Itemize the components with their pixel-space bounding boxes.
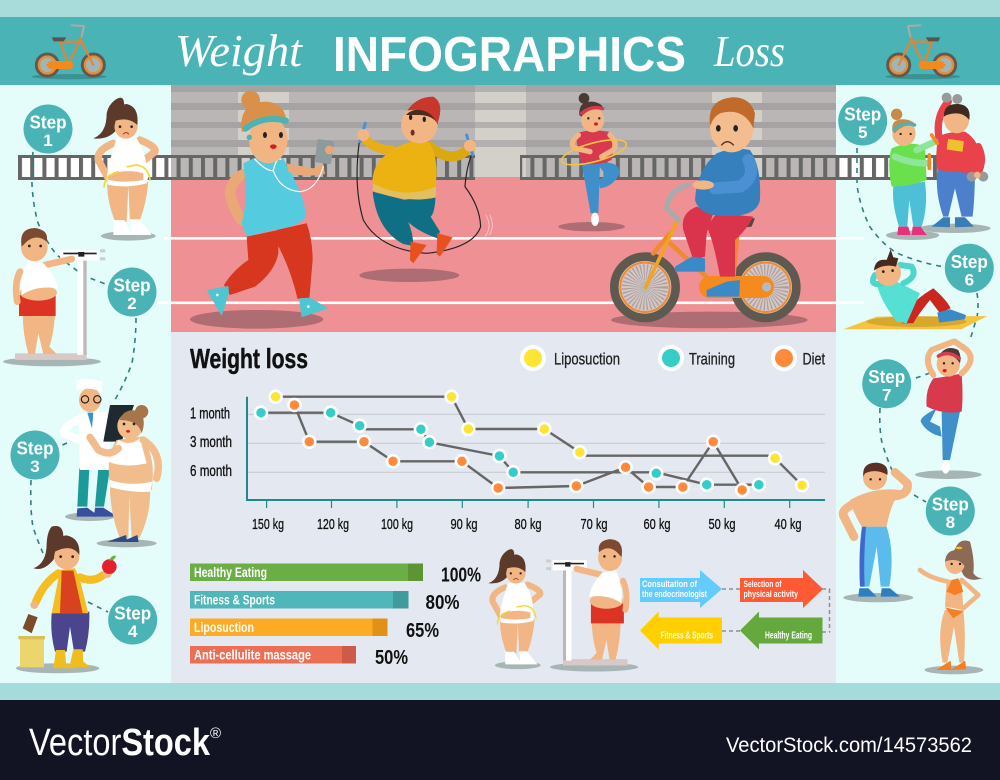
step badge 2 bbox=[108, 268, 156, 316]
arrow: consultation bbox=[640, 570, 722, 608]
y axis labels bbox=[190, 406, 232, 480]
running track bbox=[157, 177, 864, 332]
character: step 7 woman in tree pose bbox=[915, 342, 982, 479]
arrow: fitness and sports: Fitness & Sports bbox=[660, 630, 713, 642]
step badge 6: Step bbox=[951, 252, 988, 272]
stadium stands bbox=[171, 85, 836, 180]
legend: liposuction bbox=[522, 347, 620, 369]
arrow: selection of activity: Selection of bbox=[744, 579, 782, 590]
step badge 1 bbox=[24, 104, 72, 154]
series: diet points bbox=[288, 399, 748, 496]
y axis labels: 6 month bbox=[190, 463, 232, 480]
footer bar bbox=[0, 700, 1000, 780]
character: overweight woman in underwear bbox=[90, 405, 158, 547]
step badge 7 bbox=[862, 359, 911, 408]
legend: training: Training bbox=[689, 350, 735, 368]
character: woman discarding junk food, holding apple bbox=[16, 526, 117, 673]
header band bbox=[0, 17, 1000, 85]
step badge 3: Step bbox=[16, 438, 54, 458]
step badge 3: 3 bbox=[30, 457, 40, 476]
footer logo: VectorStock bbox=[29, 722, 211, 764]
x axis labels: 120 kg bbox=[317, 516, 349, 533]
step badge 2: Step bbox=[114, 276, 150, 296]
bar: healthy eating bbox=[190, 564, 481, 586]
y axis labels: 1 month bbox=[190, 406, 230, 422]
character: step 6 man doing sit-ups on mat bbox=[843, 249, 987, 329]
fence railing left bbox=[18, 155, 475, 180]
step badge 4: Step bbox=[114, 604, 151, 624]
arrow: selection of activity bbox=[740, 570, 823, 608]
character: woman with hula hoop bbox=[558, 93, 629, 231]
bar chart: methods bbox=[190, 564, 481, 669]
legend: diet: Diet bbox=[802, 350, 825, 368]
step badge 6 bbox=[945, 244, 994, 293]
x axis labels: 70 kg bbox=[580, 516, 608, 533]
step badge 4 bbox=[108, 596, 157, 644]
step badge 7: Step bbox=[868, 367, 905, 387]
step badge 1: Step bbox=[30, 112, 66, 132]
step badge 7: 7 bbox=[882, 386, 891, 405]
arrow: healthy eating: Healthy Eating bbox=[765, 630, 812, 642]
legend bbox=[522, 347, 825, 369]
x axis labels: 90 kg bbox=[450, 516, 478, 533]
bar: liposuction: 65% bbox=[406, 620, 439, 642]
character: man jumping rope bbox=[357, 97, 492, 282]
step badge 6: 6 bbox=[965, 270, 974, 289]
arrow: healthy eating bbox=[740, 612, 822, 650]
legend: training bbox=[660, 347, 735, 369]
heading: INFOGRAPHICS: INFOGRAPHICS bbox=[333, 28, 686, 82]
bar: fitness and sports bbox=[190, 591, 460, 614]
step badge 8 bbox=[926, 486, 975, 536]
arrow: consultation: Consultation of bbox=[642, 579, 698, 590]
legend: diet bbox=[773, 347, 825, 369]
x axis labels: 150 kg bbox=[252, 516, 284, 533]
bar: anti-cellulite massage bbox=[190, 646, 408, 669]
arrow: fitness and sports bbox=[640, 612, 722, 650]
step badge 8: Step bbox=[932, 494, 969, 514]
bar: fitness and sports: 80% bbox=[426, 592, 460, 614]
series: training points bbox=[255, 407, 765, 491]
x axis labels: 100 kg bbox=[381, 516, 413, 533]
bar: fitness and sports: Fitness & Sports bbox=[194, 592, 275, 608]
character: step 2 man on scale bbox=[3, 228, 105, 366]
x axis labels bbox=[252, 516, 802, 533]
heading: script word Loss: Loss bbox=[713, 27, 785, 76]
x axis labels: 50 kg bbox=[708, 516, 736, 533]
step badge 8: 8 bbox=[946, 513, 955, 532]
connector dashes: steps bbox=[31, 148, 978, 612]
series lines bbox=[276, 397, 802, 485]
legend: liposuction: Liposuction bbox=[554, 350, 620, 368]
step badge 2: 2 bbox=[127, 294, 137, 313]
heading: script word Weight: Weight bbox=[175, 25, 303, 76]
step badge 1: 1 bbox=[43, 131, 53, 150]
step badge 5: 5 bbox=[858, 123, 867, 142]
character: step 8 muscular man bbox=[843, 463, 913, 602]
footer image id: VectorStock.com/14573562 bbox=[726, 734, 972, 757]
series: liposuction points bbox=[270, 391, 808, 491]
fence railing right bbox=[520, 155, 937, 180]
registered mark: ® bbox=[210, 725, 221, 742]
character: step 1 woman measuring waist bbox=[93, 98, 156, 241]
character: woman running with phone bbox=[190, 91, 334, 329]
bar: healthy eating: Healthy Eating bbox=[194, 564, 267, 580]
x axis labels: 80 kg bbox=[514, 516, 542, 533]
step badge 3 bbox=[10, 430, 60, 480]
bar: liposuction bbox=[190, 618, 439, 642]
y axis labels: 3 month bbox=[190, 434, 232, 451]
character: waist-measuring woman, lower panel bbox=[488, 549, 541, 669]
icon: bicycle left bbox=[31, 25, 107, 79]
bar: anti-cellulite massage: 50% bbox=[375, 647, 408, 669]
process arrows bbox=[640, 570, 830, 650]
character: slim woman in bikini bbox=[920, 540, 985, 674]
heading: Weight loss: Weight loss bbox=[190, 343, 308, 374]
character: man on bicycle bbox=[611, 97, 808, 328]
step badge 4: 4 bbox=[128, 622, 138, 641]
arrow: consultation: the endocrinologist bbox=[642, 589, 708, 600]
arrow: selection of activity: physical activity bbox=[744, 589, 799, 600]
character: doctor with clipboard bbox=[64, 379, 134, 521]
x axis labels: 60 kg bbox=[644, 516, 670, 533]
x axis labels: 40 kg bbox=[774, 516, 802, 533]
step badge 5 bbox=[838, 96, 887, 146]
icon: bicycle right bbox=[885, 25, 961, 79]
characters: step 5 couple with dumbbells bbox=[886, 93, 991, 240]
line chart: weight loss over time bbox=[190, 391, 825, 533]
bar: anti-cellulite massage: Anti-cellulite massage bbox=[194, 646, 311, 662]
character: man on scale, lower panel bbox=[546, 539, 638, 672]
bar: liposuction: Liposuction bbox=[194, 619, 254, 635]
step badge 5: Step bbox=[844, 104, 881, 124]
bar: healthy eating: 100% bbox=[441, 564, 481, 586]
